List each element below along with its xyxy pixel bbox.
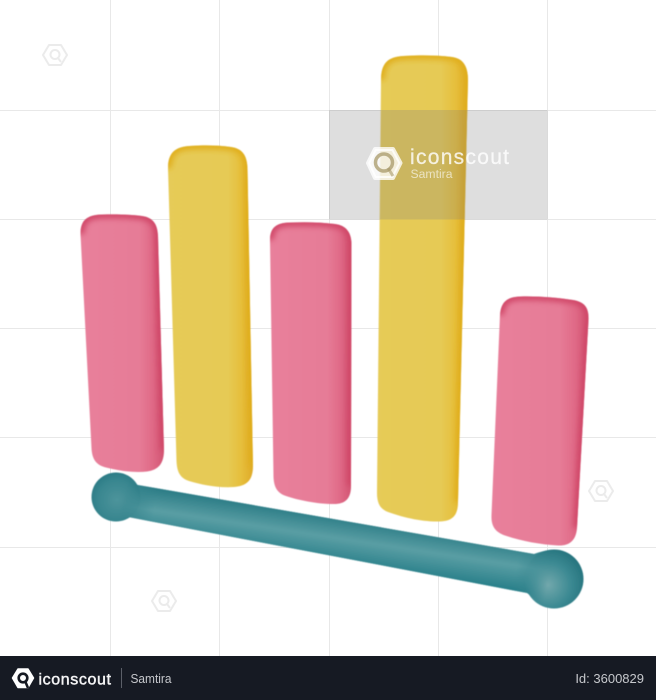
axis rod with rounded ends bbox=[92, 472, 584, 608]
bar 5: pink bbox=[491, 296, 589, 546]
watermark brand text: iconscout bbox=[410, 146, 509, 169]
footer author: Samtira bbox=[130, 671, 172, 686]
watermark author text: Samtira bbox=[410, 169, 453, 181]
bar 2: yellow bbox=[168, 145, 253, 487]
footer bar bbox=[0, 656, 656, 700]
bar 3: pink bbox=[270, 222, 352, 504]
watermark panel bbox=[329, 110, 548, 220]
watermark logo bbox=[368, 149, 400, 178]
bar 1: pink bbox=[80, 214, 164, 472]
footer id: Id: 3600829 bbox=[575, 671, 644, 686]
footer divider bbox=[121, 668, 122, 688]
small watermark icons bbox=[43, 45, 613, 611]
footer logo bbox=[12, 669, 34, 688]
bar 4: yellow bbox=[377, 55, 468, 522]
footer brand text: iconscout bbox=[38, 672, 112, 688]
